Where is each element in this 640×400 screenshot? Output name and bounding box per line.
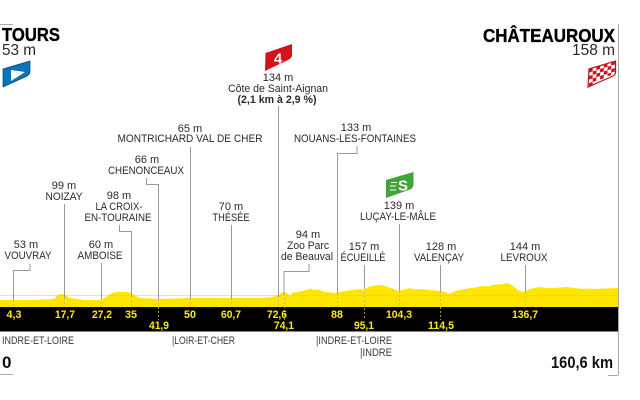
kilometre figures: 27,2: [92, 309, 112, 321]
kilometre figures: 35: [125, 309, 137, 321]
label: Écueillé: [340, 241, 386, 288]
label: Écueillé: 157 m: [349, 241, 379, 253]
kilometre figures: 17,7: [55, 309, 75, 321]
icon: category 4 climb flag: 4: [274, 50, 283, 68]
icon: category 4 climb flag: [265, 44, 292, 71]
kilometre figures: 4,3: [6, 309, 22, 321]
start town: Tours: [2, 25, 60, 59]
label: Thésée: THÉSÉE: [212, 211, 250, 224]
label: Thésée: [212, 201, 250, 299]
label: Luçay-le-Mâle: LUÇAY-LE-MÂLE: [360, 210, 436, 223]
total distance: 160,6 km: [551, 353, 613, 372]
kilometre figures: [6, 309, 538, 332]
kilometre figures: 41,9: [149, 320, 169, 332]
finish town: Châteauroux: CHÂTEAUROUX: [483, 25, 615, 46]
start town: Tours: 53 m: [2, 42, 36, 59]
label: Valençay: [414, 241, 465, 291]
label: Côte de Saint-Aignan: (2,1 km à 2,9 %): [238, 94, 317, 106]
label: Levroux: [500, 241, 548, 292]
label: Vouvray: 53 m: [14, 239, 38, 251]
label: Montrichard Val de Cher: 65 m: [178, 123, 202, 135]
label: Valençay: 128 m: [426, 241, 456, 253]
department labels: [2, 335, 392, 359]
label: Nouans-les-Fontaines: NOUANS-LES-FONTAINES: [294, 133, 416, 145]
kilometre figures: 60,7: [221, 309, 241, 321]
label: Chenonceaux: 66 m: [135, 154, 159, 166]
label: La Croix-en-Touraine: [84, 190, 152, 297]
label: Amboise: 60 m: [89, 239, 113, 251]
label: Noizay: 99 m: [52, 180, 76, 192]
label: Amboise: AMBOISE: [78, 250, 122, 262]
label: La Croix-en-Touraine: EN-TOURAINE: [84, 212, 152, 224]
kilometre figures: 50: [184, 309, 196, 321]
label: La Croix-en-Touraine: 98 m: [107, 190, 131, 202]
label: Zoo Parc de Beauval: [281, 229, 333, 294]
label: Côte de Saint-Aignan: 134 m: [263, 72, 293, 84]
label: Vouvray: [4, 239, 52, 300]
finish town: Châteauroux: [483, 25, 615, 59]
dashed kilometre markers: [14, 288, 526, 320]
icon: start flag: [3, 61, 30, 87]
kilometre figures: 74,1: [274, 320, 294, 332]
label: Chenonceaux: [108, 154, 185, 300]
kilometre figures: 114,5: [428, 320, 454, 332]
label: Côte de Saint-Aignan: [228, 72, 328, 297]
label: Zoo Parc de Beauval: 94 m: [296, 229, 320, 241]
label: Levroux: LEVROUX: [500, 252, 548, 264]
label: Nouans-les-Fontaines: 133 m: [341, 122, 371, 134]
label: Vouvray: VOUVRAY: [4, 250, 52, 262]
kilometre figures: 136,7: [512, 309, 538, 321]
label: Luçay-le-Mâle: 139 m: [384, 200, 414, 212]
label: Amboise: [78, 239, 122, 299]
label: Nouans-les-Fontaines: [294, 122, 416, 294]
label: Chenonceaux: CHENONCEAUX: [108, 165, 185, 177]
department labels: INDRE-ET-LOIRE: [2, 335, 74, 347]
label: La Croix-en-Touraine: LA CROIX-: [96, 201, 143, 213]
label: Luçay-le-Mâle: [360, 200, 436, 291]
label: Valençay: VALENÇAY: [414, 252, 465, 264]
label: Noizay: [46, 180, 83, 298]
icon: intermediate sprint flag: S: [398, 178, 408, 194]
kilometre figures: 72,6: [267, 309, 287, 321]
icon: finish flag: [588, 61, 616, 87]
label: Noizay: NOIZAY: [46, 191, 83, 203]
department labels: |LOIR-ET-CHER: [172, 335, 235, 347]
label: Montrichard Val de Cher: [118, 123, 263, 299]
icon: intermediate sprint flag: [386, 172, 414, 198]
label: Côte de Saint-Aignan: Côte de Saint-Aignan: [228, 83, 328, 95]
label: Thésée: 70 m: [219, 201, 243, 213]
label: Levroux: 144 m: [510, 241, 540, 253]
kilometre figures: 104,3: [386, 309, 412, 321]
department labels: |INDRE: [360, 347, 392, 359]
kilometre figures: 95,1: [354, 320, 374, 332]
label: Montrichard Val de Cher: MONTRICHARD VAL DE CHER: [118, 133, 263, 145]
start town: Tours: TOURS: [2, 25, 60, 45]
finish town: Châteauroux: 158 m: [572, 42, 615, 59]
kilometre figures: 88: [331, 309, 343, 321]
department labels: |INDRE-ET-LOIRE: [316, 335, 392, 347]
label: Zoo Parc de Beauval: de Beauval: [281, 251, 333, 263]
start distance: 0: [2, 353, 11, 372]
label: Zoo Parc de Beauval: Zoo Parc: [287, 240, 329, 252]
label: Écueillé: ÉCUEILLÉ: [340, 251, 386, 264]
black kilometre band: [0, 307, 618, 332]
elevation profile: [0, 283, 618, 307]
